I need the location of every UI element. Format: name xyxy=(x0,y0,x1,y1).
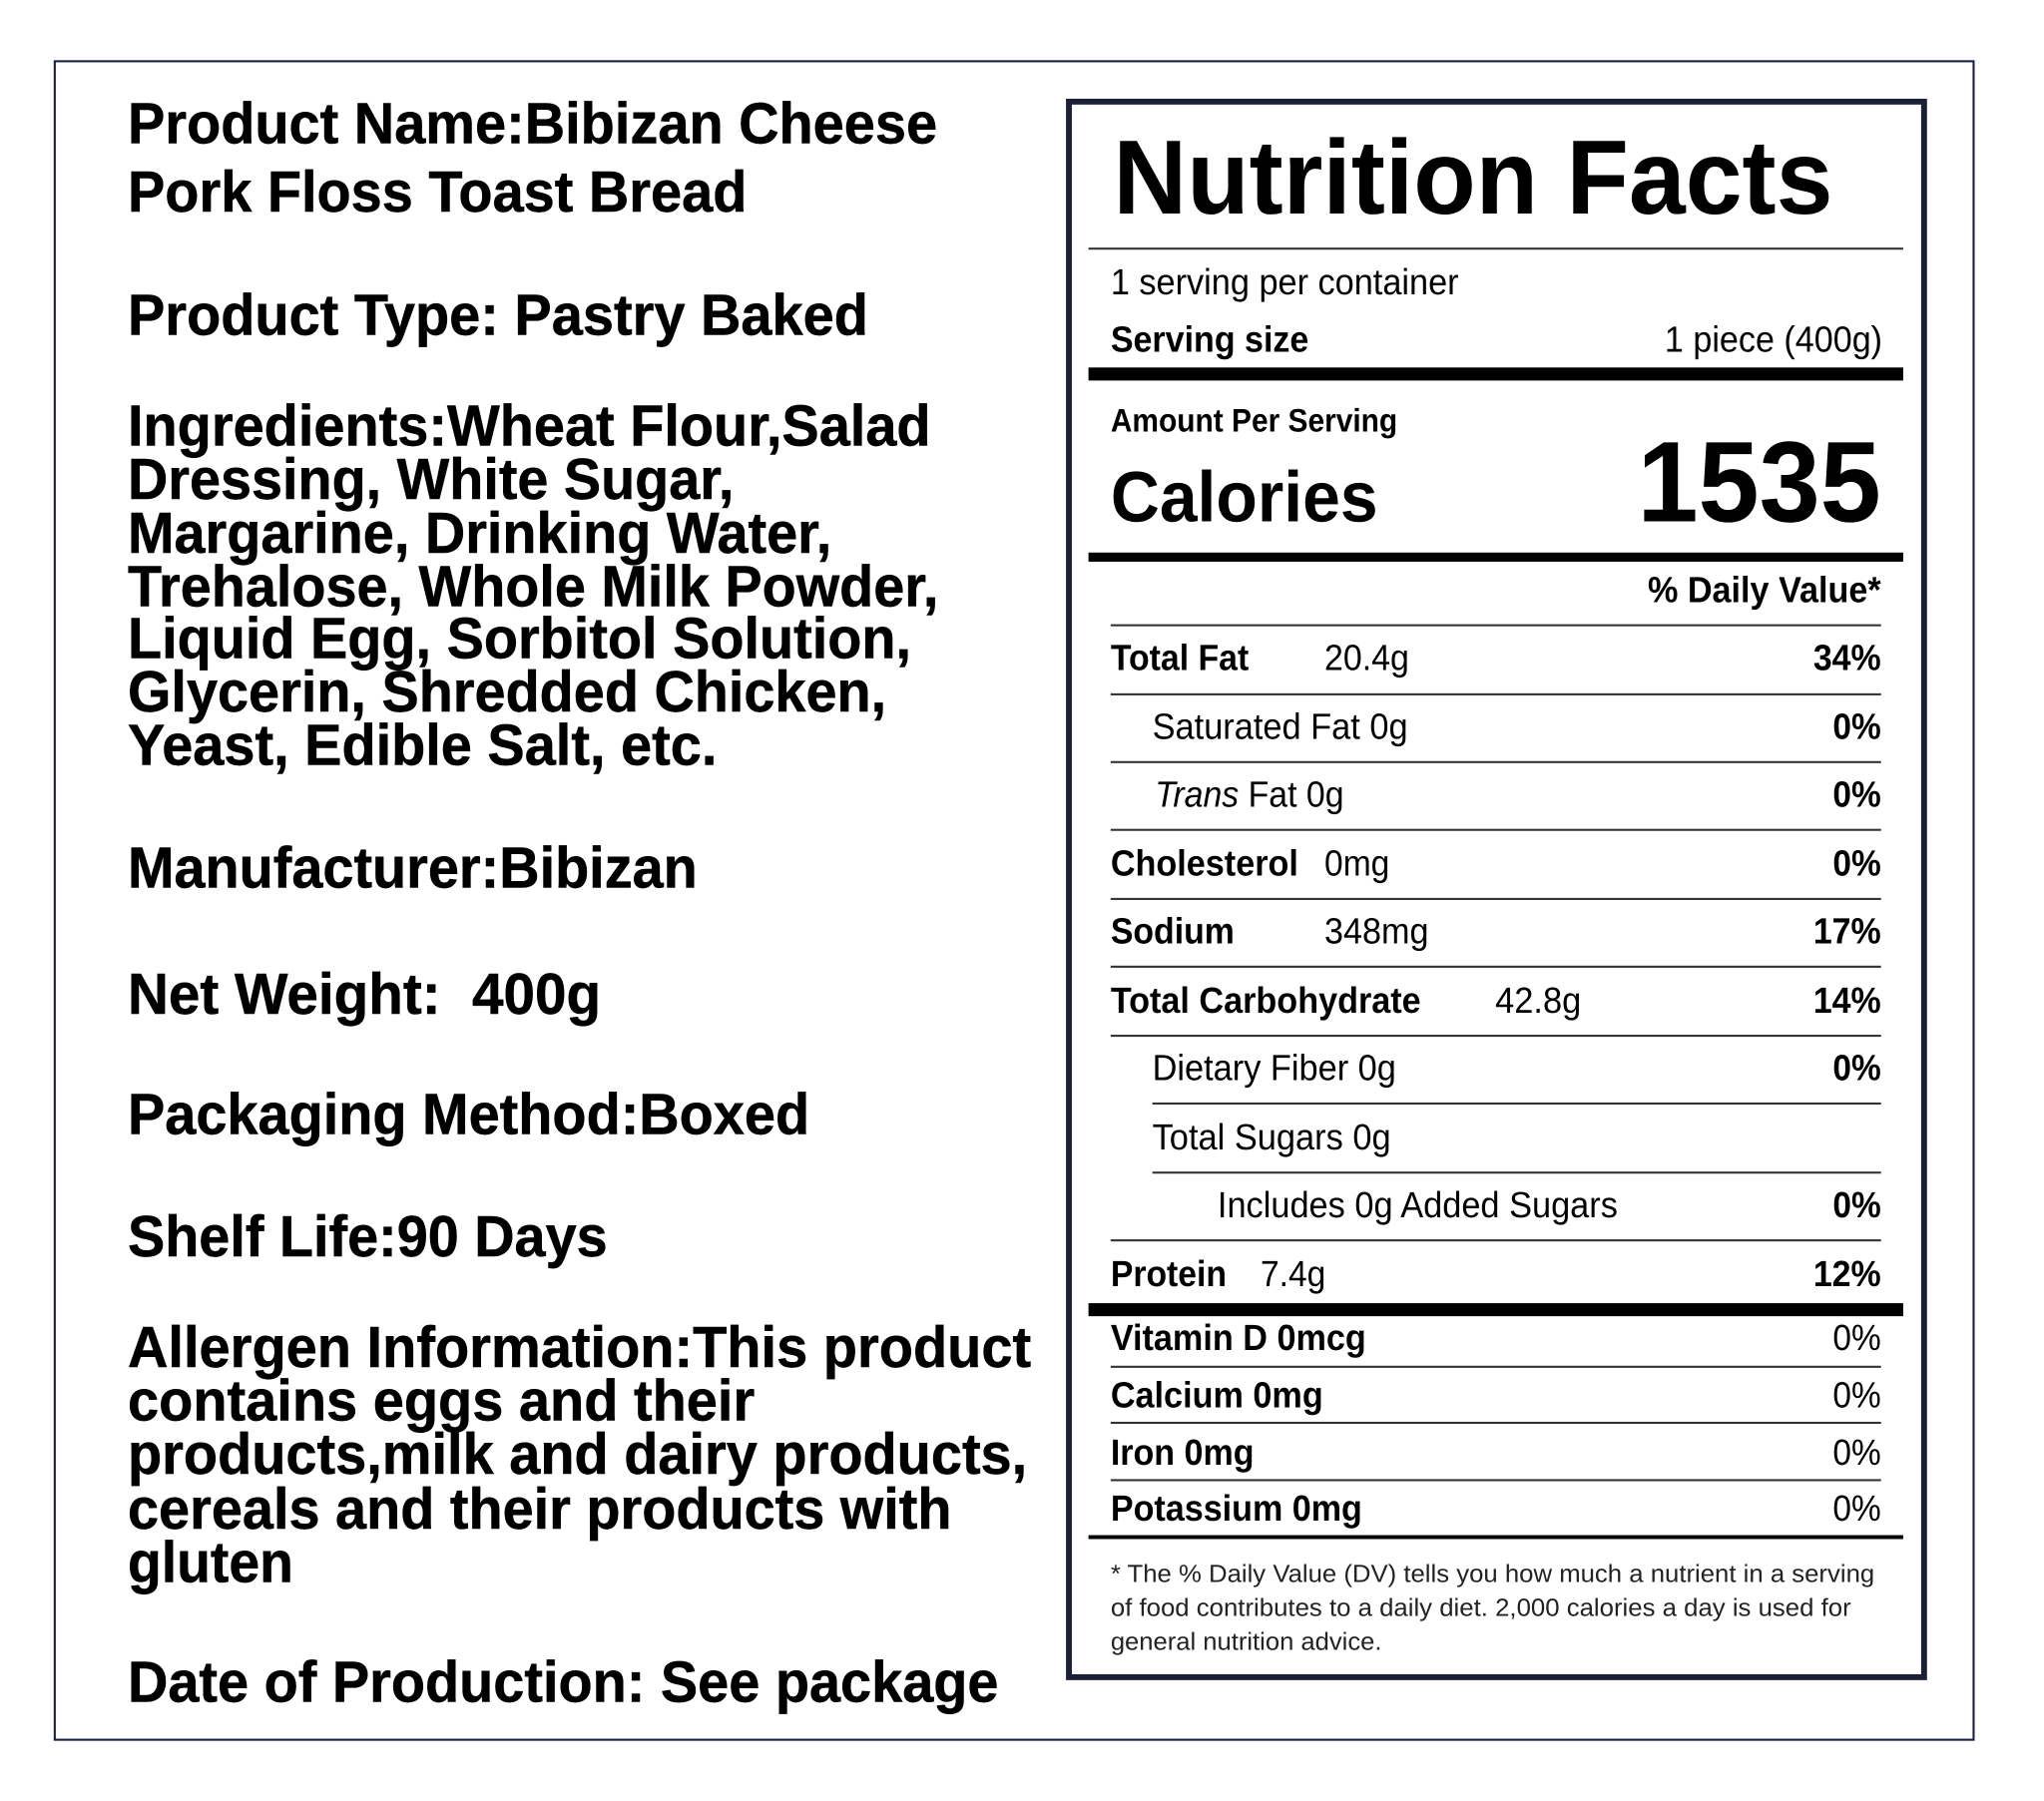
calories: Calories xyxy=(1111,456,1378,537)
row: calcium: 0% xyxy=(1832,1375,1881,1415)
panel: product information xyxy=(128,93,1031,1715)
allergen information: gluten xyxy=(128,1532,293,1595)
product name: Pork Floss Toast Bread xyxy=(128,161,747,225)
row: added sugars: 0% xyxy=(1832,1184,1881,1225)
row: iron: Iron 0mg xyxy=(1111,1432,1254,1473)
row: vitamin d: 0% xyxy=(1832,1317,1881,1358)
row: trans fat: Trans Fat 0g xyxy=(1155,774,1344,814)
ingredients: Glycerin, Shredded Chicken, xyxy=(128,661,886,724)
row: vitamin d xyxy=(1111,1317,1881,1358)
row: sodium: 348mg xyxy=(1324,911,1429,951)
row: cholesterol: Cholesterol xyxy=(1111,843,1298,884)
row: protein: 12% xyxy=(1813,1253,1881,1294)
row: trans fat xyxy=(1155,774,1881,814)
product name: Product Name:Bibizan Cheese xyxy=(128,93,937,157)
row: cholesterol xyxy=(1111,843,1881,884)
row: saturated fat xyxy=(1153,706,1881,746)
footnote: of food contributes to a daily diet. 2,000 calories a day is used for xyxy=(1111,1595,1852,1622)
allergen information: contains eggs and their xyxy=(128,1370,755,1434)
row: protein xyxy=(1111,1253,1881,1294)
row: total sugars: Total Sugars 0g xyxy=(1153,1117,1391,1157)
calories: 1535 xyxy=(1637,417,1881,546)
row: sodium: Sodium xyxy=(1111,911,1235,951)
row: added sugars: Includes 0g Added Sugars xyxy=(1218,1184,1618,1225)
row: calcium: Calcium 0mg xyxy=(1111,1375,1323,1415)
amount per serving: Amount Per Serving xyxy=(1111,403,1397,439)
ingredients: Margarine, Drinking Water, xyxy=(128,502,831,566)
row: vitamin d: Vitamin D 0mcg xyxy=(1111,1317,1366,1358)
row: trans fat: 0% xyxy=(1832,774,1881,814)
allergen information xyxy=(128,1316,1031,1595)
calories xyxy=(1111,417,1881,546)
allergen information: products,milk and dairy products, xyxy=(128,1423,1027,1487)
row: protein: 7.4g xyxy=(1261,1253,1325,1294)
row: total carbohydrate: Total Carbohydrate xyxy=(1111,980,1421,1021)
nutrition facts title: Nutrition Facts xyxy=(1113,120,1832,237)
panel: nutrition facts xyxy=(1069,102,1924,1677)
footnote: * The % Daily Value (DV) tells you how much a nutrient in a serving xyxy=(1111,1562,1874,1588)
row: protein: Protein xyxy=(1111,1253,1227,1294)
row: dietary fiber xyxy=(1153,1048,1881,1089)
row: iron xyxy=(1111,1432,1881,1473)
row: dietary fiber: Dietary Fiber 0g xyxy=(1153,1048,1396,1089)
row: potassium: 0% xyxy=(1832,1489,1881,1529)
ingredients: Ingredients:Wheat Flour,Salad xyxy=(128,395,931,459)
row: saturated fat: 0% xyxy=(1832,706,1881,746)
allergen information: Allergen Information:This product xyxy=(128,1316,1031,1380)
row: cholesterol: 0mg xyxy=(1324,843,1389,884)
footnote: general nutrition advice. xyxy=(1111,1629,1381,1656)
allergen information: cereals and their products with xyxy=(128,1478,951,1542)
row: iron: 0% xyxy=(1832,1432,1881,1473)
footnote xyxy=(1111,1562,1874,1656)
ingredients xyxy=(128,395,938,778)
packaging method: Packaging Method:Boxed xyxy=(128,1083,809,1146)
row: dietary fiber: 0% xyxy=(1832,1048,1881,1089)
serving size xyxy=(1111,319,1882,359)
serving size: Serving size xyxy=(1111,319,1308,359)
panel border xyxy=(1069,102,1924,1677)
row: total fat: Total Fat xyxy=(1111,638,1249,677)
row: cholesterol: 0% xyxy=(1832,843,1881,884)
daily value heading: % Daily Value* xyxy=(1648,570,1881,610)
date of production: Date of Production: See package xyxy=(128,1651,998,1715)
row: total carbohydrate: 14% xyxy=(1813,980,1881,1021)
ingredients: Trehalose, Whole Milk Powder, xyxy=(128,555,938,619)
row: saturated fat: Saturated Fat 0g xyxy=(1153,706,1408,746)
row: added sugars xyxy=(1218,1184,1881,1225)
ingredients: Yeast, Edible Salt, etc. xyxy=(128,714,717,778)
row: sodium xyxy=(1111,911,1881,951)
product name xyxy=(128,93,937,225)
row: potassium xyxy=(1111,1489,1881,1529)
ingredients: Dressing, White Sugar, xyxy=(128,448,734,512)
manufacturer: Manufacturer:Bibizan xyxy=(128,837,698,900)
row: calcium xyxy=(1111,1375,1881,1415)
row: total fat xyxy=(1111,638,1881,677)
row: total carbohydrate: 42.8g xyxy=(1495,980,1581,1021)
row: potassium: Potassium 0mg xyxy=(1111,1489,1362,1529)
row: total fat: 34% xyxy=(1813,638,1881,677)
row: total fat: 20.4g xyxy=(1324,638,1409,677)
ingredients: Liquid Egg, Sorbitol Solution, xyxy=(128,608,911,672)
shelf life: Shelf Life:90 Days xyxy=(128,1205,608,1269)
net weight: Net Weight: 400g xyxy=(128,963,601,1027)
serving size: 1 piece (400g) xyxy=(1665,319,1882,359)
product type: Product Type: Pastry Baked xyxy=(128,284,868,348)
row: total carbohydrate xyxy=(1111,980,1881,1021)
servings per container: 1 serving per container xyxy=(1111,262,1459,302)
row: sodium: 17% xyxy=(1813,911,1881,951)
